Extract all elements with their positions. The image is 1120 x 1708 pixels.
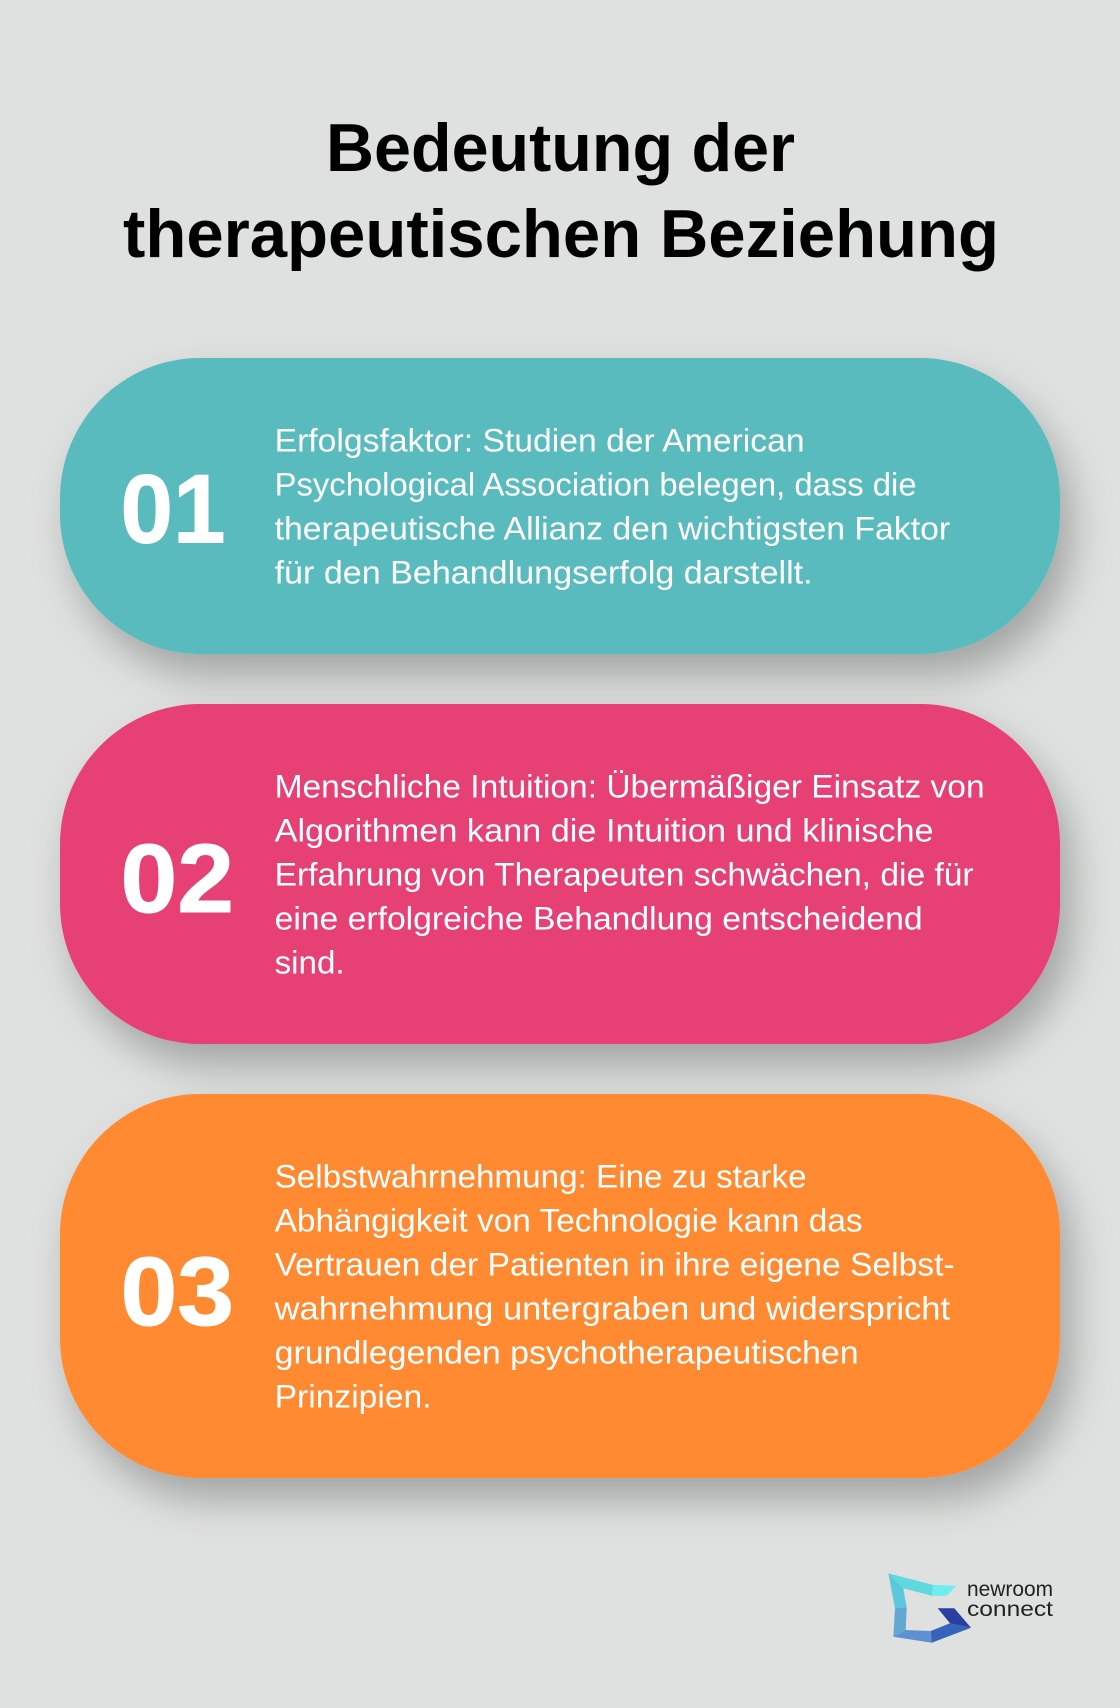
text block 01: therapeutische Allianz den wichtigsten Faktor (275, 510, 950, 546)
number 03: 03 (120, 1237, 234, 1346)
number 02: 02 (120, 824, 234, 933)
panel: 02 Menschliche Intuition (60, 704, 1060, 1044)
text block 03 (274, 1158, 955, 1414)
text block 02: Erfahrung von Therapeuten schwächen, die für (275, 856, 974, 892)
text block 03: wahrnehmung untergraben und widerspricht (274, 1290, 950, 1326)
text block 03: Vertrauen der Patienten in ihre eigene Selbst- (275, 1246, 955, 1282)
card background orange (60, 1094, 1060, 1478)
title: therapeutischen Beziehung (123, 196, 999, 272)
number 01: 01 (120, 454, 226, 564)
panel: 03 Selbstwahrnehmung (60, 1094, 1060, 1478)
title: Bedeutung der (326, 110, 795, 186)
logo: newroom connect (888, 1573, 1053, 1643)
title (123, 110, 999, 272)
text block 02: Menschliche Intuition: Übermäßiger Einsatz von (275, 768, 985, 804)
text block 02: sind. (275, 944, 345, 980)
card background pink (60, 704, 1060, 1044)
text block 01: für den Behandlungserfolg darstellt. (275, 554, 813, 590)
text block 03: Abhängigkeit von Technologie kann das (275, 1202, 863, 1238)
text block 02: Algorithmen kann die Intuition und klinische (275, 812, 934, 848)
text block 02 (275, 768, 985, 980)
logo wordmark: newroom (967, 1578, 1053, 1601)
icon: logo mark (888, 1573, 971, 1643)
text block 01: Erfolgsfaktor: Studien der American (275, 422, 805, 458)
text block 03: Selbstwahrnehmung: Eine zu starke (275, 1158, 807, 1194)
card background teal (60, 358, 1060, 654)
text block 01 (275, 422, 950, 590)
logo wordmark: connect (967, 1598, 1053, 1621)
panel: 01 Erfolgsfaktor (60, 358, 1060, 654)
text block 01: Psychological Association belegen, dass die (275, 466, 917, 502)
text block 03: Prinzipien. (275, 1378, 432, 1414)
text block 02: eine erfolgreiche Behandlung entscheidend (275, 900, 923, 936)
text block 03: grundlegenden psychotherapeutischen (275, 1334, 859, 1370)
logo wordmark (967, 1578, 1053, 1621)
